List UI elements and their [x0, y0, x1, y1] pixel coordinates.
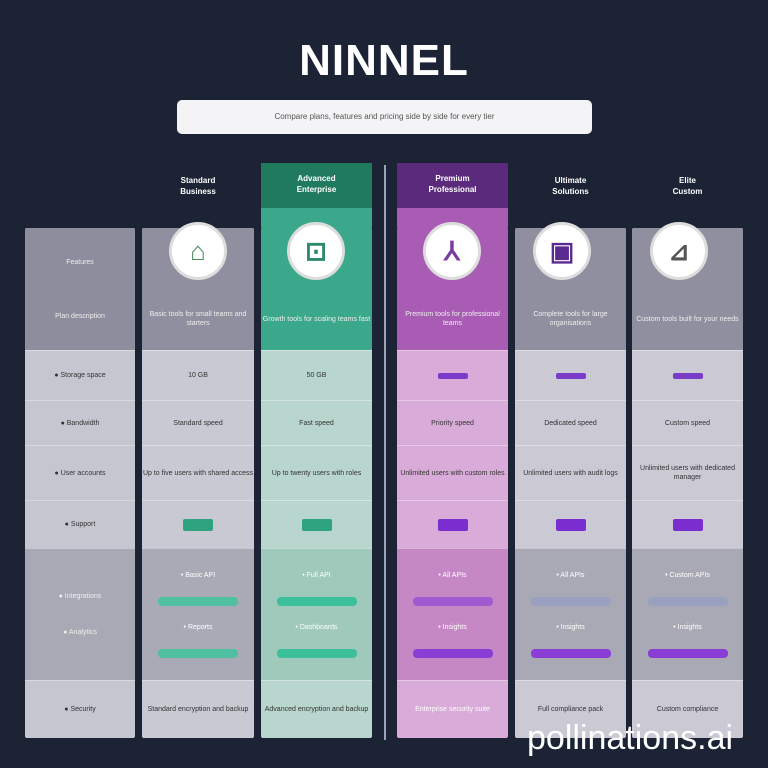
column 5 grey: [632, 228, 743, 738]
icon 3: [423, 222, 481, 280]
watermark: pollinations.ai: [527, 719, 733, 757]
label column: ● Analytics: [63, 629, 97, 636]
column 3 purple: [397, 228, 508, 738]
column 5 grey: Custom speed: [665, 420, 710, 426]
icon 4: [533, 222, 591, 280]
icon 1: [169, 222, 227, 280]
column 2 teal: [261, 228, 372, 738]
column 4 grey: Dedicated speed: [544, 420, 597, 426]
column 3 purple: Unlimited users with custom roles: [400, 470, 505, 476]
icon 5: ⊿: [668, 236, 690, 266]
icon 3: ⅄: [444, 236, 460, 266]
column 5 grey: Custom tools built for your needs: [636, 316, 739, 322]
column 2 teal: 50 GB: [307, 372, 326, 379]
header 1: Standard: [181, 176, 215, 185]
column 2 teal: Up to twenty users with roles: [272, 470, 361, 476]
search bar: Compare plans, features and pricing side by side for every tier: [274, 112, 495, 121]
column 2 teal: Advanced encryption and backup: [265, 706, 368, 713]
column 1 grey: 10 GB: [188, 372, 208, 379]
column 3 purple: Enterprise security suite: [415, 706, 490, 713]
header 3: Professional: [428, 185, 476, 194]
icon 4: ▣: [550, 236, 574, 266]
title: NINNEL: [299, 36, 469, 85]
column 1 grey: Basic tools for small teams and starters: [150, 311, 246, 327]
column 4 grey: Full compliance pack: [538, 706, 603, 713]
header 5: Elite: [679, 176, 696, 185]
column 1 grey: Up to five users with shared access: [143, 470, 253, 476]
search bar: [177, 100, 592, 134]
label column: ● User accounts: [55, 470, 105, 476]
icon 1: ⌂: [190, 236, 206, 266]
label column: Features: [66, 258, 94, 266]
header 3: [397, 163, 508, 228]
header 4: Ultimate: [555, 176, 586, 185]
header 2: Enterprise: [297, 185, 336, 194]
column 3 purple: • All APIs • Insights: [438, 572, 467, 631]
column 1 grey: Standard speed: [173, 420, 223, 426]
column 1 grey: • Basic API • Reports: [181, 572, 215, 631]
header 1: Business: [180, 187, 216, 196]
column 1 grey: [142, 228, 254, 738]
header 5: Custom: [673, 187, 702, 196]
icon 2: ⊡: [305, 236, 327, 266]
column 3 purple: Premium tools for professional teams: [405, 311, 500, 327]
column 4 grey: [515, 228, 626, 738]
column 2 teal: • Full API • Dashboards: [295, 572, 338, 631]
column 1 grey: Standard encryption and backup: [148, 706, 248, 713]
column 4 grey: • All APIs • Insights: [556, 572, 585, 631]
divider: [384, 165, 386, 740]
column 2 teal: Growth tools for scaling teams fast: [263, 316, 370, 322]
icon 5: [650, 222, 708, 280]
header 1: [180, 176, 216, 196]
label column: [25, 228, 135, 738]
label column: ● Bandwidth: [61, 420, 99, 426]
header 4: [552, 176, 589, 196]
column 5 grey: Unlimited users with dedicated manager: [640, 465, 735, 481]
header 3: Premium: [435, 174, 470, 183]
column 4 grey: Unlimited users with audit logs: [523, 470, 618, 476]
header 2: Advanced: [297, 174, 336, 183]
column 2 teal: Fast speed: [299, 420, 334, 426]
label column: ● Security: [64, 706, 96, 713]
header 2: [261, 163, 372, 228]
label column: ● Support: [65, 521, 95, 528]
header 4: Solutions: [552, 187, 589, 196]
column 5 grey: • Custom APIs • Insights: [665, 572, 710, 631]
label column: ● Storage space: [54, 372, 106, 379]
label column: ● Integrations: [59, 593, 101, 600]
header 5: [672, 176, 702, 196]
column 5 grey: Custom compliance: [657, 706, 718, 713]
column 3 purple: Priority speed: [431, 420, 474, 426]
label column: Plan description: [55, 312, 105, 320]
column 4 grey: Complete tools for large organisations: [533, 311, 608, 327]
column headers: [180, 163, 702, 228]
icon 2: [287, 222, 345, 280]
